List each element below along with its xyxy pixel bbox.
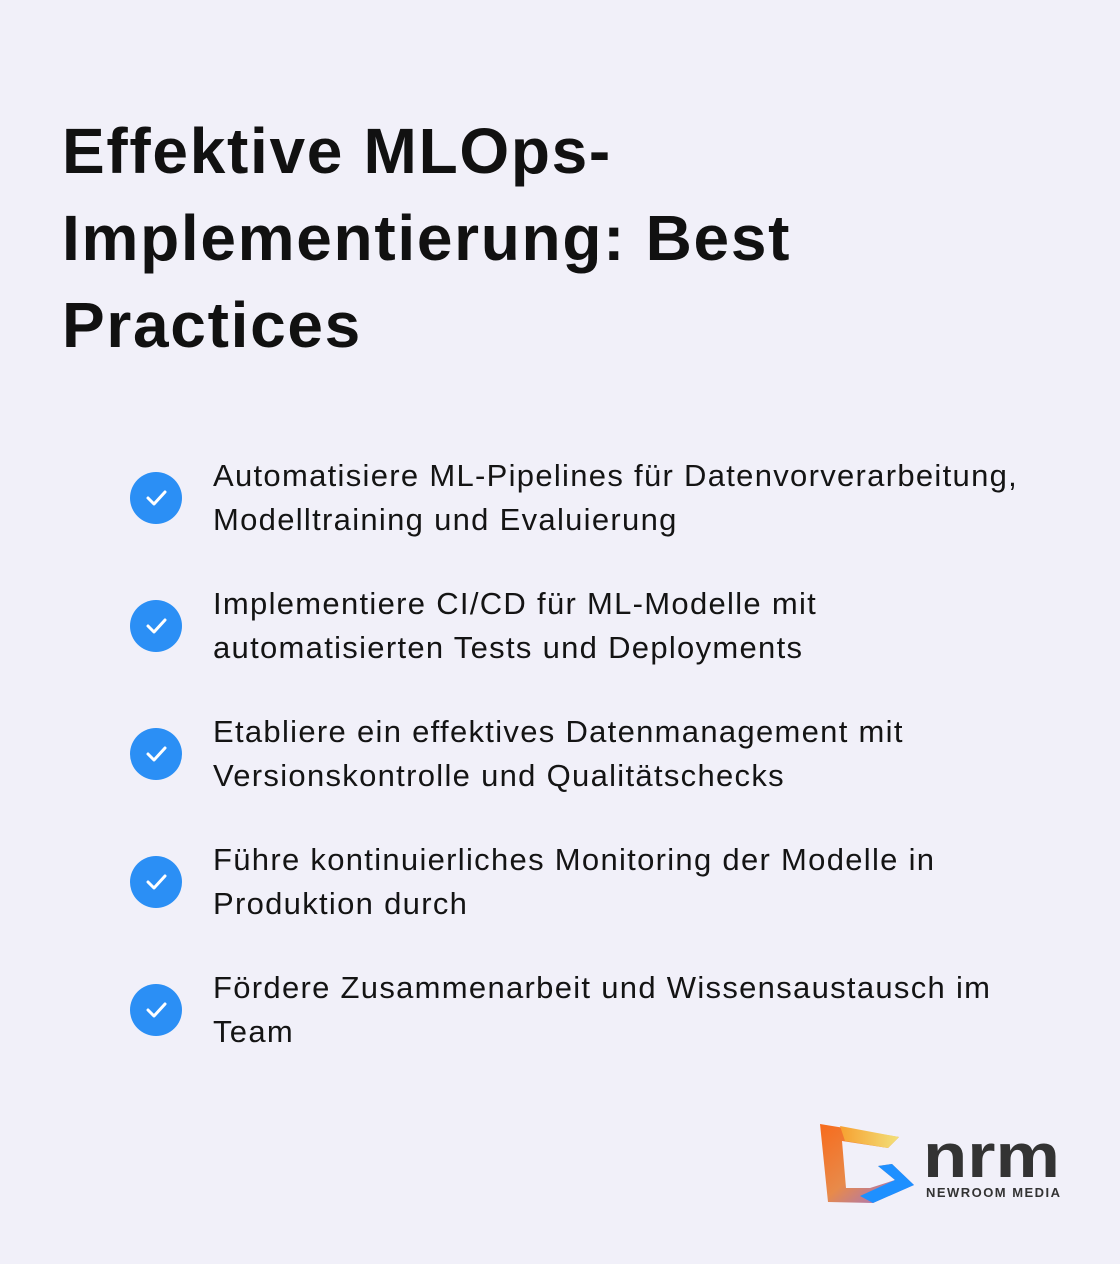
icon: check: [130, 856, 182, 908]
text: Team: [213, 1014, 294, 1049]
item 1: [130, 458, 1018, 537]
text: Versionskontrolle und Qualitätschecks: [213, 758, 785, 793]
icon: check: [130, 984, 182, 1036]
text: Produktion durch: [213, 886, 468, 921]
icon: check: [130, 472, 182, 524]
logo: nrm: [923, 1122, 1060, 1191]
logo: [820, 1122, 1061, 1203]
text: [213, 458, 1018, 537]
item 4: [130, 842, 935, 921]
title: [62, 115, 791, 361]
icon: check: [130, 600, 182, 652]
text: Modelltraining und Evaluierung: [213, 502, 678, 537]
item 3: [130, 714, 904, 793]
text: Fördere Zusammenarbeit und Wissensaustausch im: [213, 970, 991, 1005]
text: Etabliere ein effektives Datenmanagement mit: [213, 714, 904, 749]
title: Implementierung: Best: [62, 202, 791, 274]
logo: NEWROOM MEDIA: [926, 1185, 1061, 1200]
title: Practices: [62, 289, 362, 361]
text: [213, 970, 991, 1049]
text: [213, 842, 935, 921]
item 5: [130, 970, 991, 1049]
item 2: [130, 586, 817, 665]
title: Effektive MLOps-: [62, 115, 612, 187]
text: Automatisiere ML-Pipelines für Datenvorverarbeitung,: [213, 458, 1018, 493]
text: Implementiere CI/CD für ML-Modelle mit: [213, 586, 817, 621]
icon: check: [130, 728, 182, 780]
text: [213, 714, 904, 793]
text: [213, 586, 817, 665]
text: Führe kontinuierliches Monitoring der Modelle in: [213, 842, 935, 877]
text: automatisierten Tests und Deployments: [213, 630, 803, 665]
